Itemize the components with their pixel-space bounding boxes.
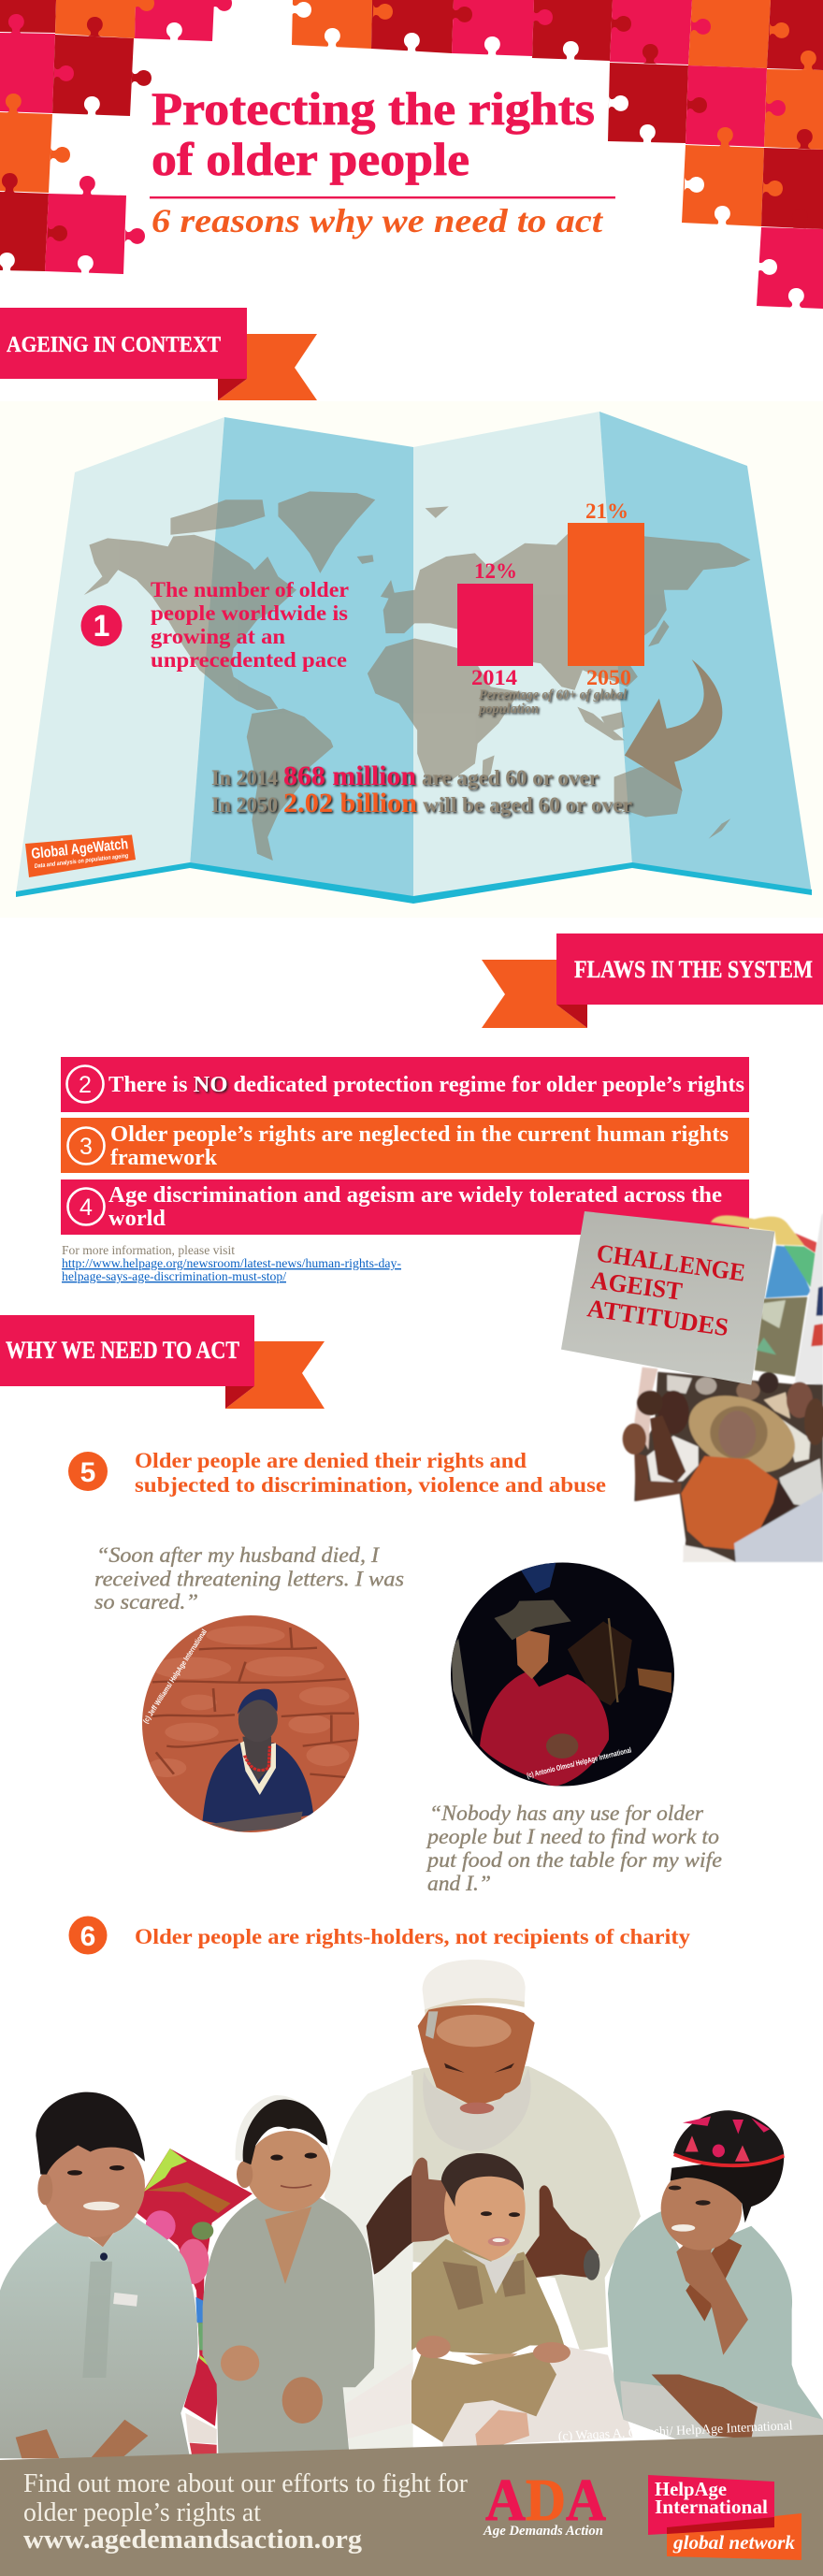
more information link: http://www.helpage.org/newsroom/latest-news/human-rights-day- (62, 1257, 401, 1271)
baby and elder hands (right half, front) (412, 2153, 599, 2446)
title (152, 82, 595, 185)
more information link: For more information, please visit (62, 1244, 235, 1258)
flaw 4 (61, 1179, 749, 1235)
boy with cap (608, 2110, 823, 2439)
quote 2: people but I need to find work to (426, 1825, 719, 1848)
boy in white cap (203, 2095, 375, 2453)
bar chart (457, 499, 644, 716)
statistic: 2050: will be aged 60 or over (423, 793, 632, 817)
logo: HelpAge International: International (655, 2496, 768, 2518)
decorative puzzle: top row (292, 0, 823, 70)
footer band (0, 2435, 823, 2576)
reason 6: 6 (80, 1921, 95, 1952)
statistic: 2050: In 2050 (211, 793, 278, 817)
photo credit: family: (c) Waqas A. Qureshi/ HelpAge International (557, 2419, 793, 2444)
logo: HelpAge International (648, 2475, 801, 2560)
bar chart: Percentage of 60+ of global (479, 687, 627, 702)
reason 5: 5 (80, 1457, 95, 1488)
photo: woman at brick wall (140, 1614, 365, 1838)
photo: protest crowd with placard: AGEIST (589, 1266, 684, 1306)
bar chart: population (477, 702, 539, 716)
quote 2: put food on the table for my wife (426, 1848, 722, 1872)
bar chart: 21% (585, 499, 628, 523)
text: older people growing (151, 578, 349, 672)
photo: protest crowd with placard: ATTITUDES (585, 1294, 730, 1341)
folded map panel (16, 412, 812, 904)
statistic: 2014: In 2014 (211, 766, 278, 789)
photo credit: man: (c) Antonio Olmos/ HelpAge International (526, 1745, 632, 1780)
arrow (625, 659, 722, 791)
photo: elder with children (0, 1960, 823, 2458)
flaw 2: There is NO dedicated protection regime for older people’s rights (108, 1073, 744, 1097)
text: older people growing: people worldwide is (151, 601, 348, 625)
statistic: 2014: are aged 60 or over (422, 766, 599, 789)
statistic: 2050: 2.02 billion (283, 788, 417, 818)
reason 5 (68, 1449, 606, 1497)
title: Protecting the rights (152, 82, 595, 135)
quote 2 (426, 1802, 722, 1895)
logo: Global AgeWatch: Global AgeWatch (31, 836, 129, 862)
world map (84, 491, 751, 861)
reason 6 (69, 1916, 691, 1955)
title: of older people (152, 133, 469, 185)
section banner: why we need to act (0, 1315, 325, 1409)
subtitle: 6 reasons why we need to act (152, 202, 603, 239)
bar chart: 2014 (471, 666, 518, 689)
section banner: ageing in context: AGEING IN CONTEXT (7, 333, 221, 357)
elder (right half, behind) (412, 1960, 641, 2447)
logo: ADA: ADA (485, 2467, 606, 2533)
flaw 3: 3 (79, 1134, 93, 1160)
flaw 4: 4 (79, 1194, 93, 1221)
footer call to action (23, 2469, 469, 2554)
flaw 3: framework (110, 1146, 218, 1170)
title rule (150, 196, 615, 198)
quote 2: “Nobody has any use for older (429, 1802, 704, 1825)
text: older people growing: unprecedented pace (151, 648, 347, 672)
flaw 3: Older people’s rights are neglected in the current human rights (110, 1122, 729, 1147)
photo: protest crowd with placard: CHALLENGE (595, 1238, 747, 1287)
logo: Global AgeWatch (25, 834, 136, 877)
logo: Global AgeWatch: Data and analysis on population ageing (34, 853, 129, 870)
quote 1: so scared.” (94, 1590, 198, 1614)
statistic: 2050 (211, 788, 632, 818)
bar chart: 12% (474, 559, 517, 583)
statistic: 2014 (211, 760, 599, 791)
flaw 2: 2 (79, 1072, 92, 1098)
reason 5: Older people are denied their rights and (135, 1449, 527, 1472)
statistic: 2014: 868 million (283, 760, 416, 791)
footer call to action: older people’s rights at (23, 2498, 261, 2527)
flaw 2 (61, 1057, 749, 1112)
logo: ADA: Age Demands Action (483, 2524, 603, 2539)
flaw 4: world (108, 1207, 166, 1231)
more information link: helpage-says-age-discrimination-must-stop/ (62, 1270, 286, 1284)
reason 6: Older people are rights-holders, not recipients of charity (135, 1925, 691, 1948)
footer call to action: www.agedemandsaction.org (23, 2525, 363, 2554)
number badge 1 (80, 605, 122, 646)
boy on left (0, 2092, 197, 2458)
photo: protest crowd with placard (561, 1211, 823, 1562)
quote 1: “Soon after my husband died, I (96, 1543, 380, 1567)
number badge 1: 1 (94, 609, 109, 643)
section banner: ageing in context (0, 308, 317, 400)
bar chart: 2050 (586, 666, 631, 689)
quote 1 (94, 1543, 404, 1614)
pillow and left clothes (137, 2075, 413, 2454)
logo: HelpAge International: global network (672, 2531, 795, 2554)
logo: HelpAge International: HelpAge (655, 2478, 727, 2500)
quote 1: received threatening letters. I was (94, 1568, 404, 1590)
section banner: flaws in the system (482, 933, 823, 1028)
reason 5: subjected to discrimination, violence and abuse (135, 1473, 606, 1497)
quote 2: and I.” (427, 1872, 491, 1895)
text: older people growing: growing at an (151, 625, 285, 648)
flaw 3 (61, 1118, 749, 1173)
photo: man in red sweater (449, 1559, 678, 1789)
text: older people growing: The number of older (151, 578, 349, 601)
flaw 4: Age discrimination and ageism are widely tolerated across the (108, 1183, 722, 1208)
section banner: why we need to act: WHY WE NEED TO ACT (6, 1337, 239, 1364)
photo credit: woman: (c) Jeff Williams/ HelpAge International (141, 1628, 209, 1725)
footer call to action: Find out more about our efforts to fight for (23, 2469, 469, 2498)
more information link (62, 1244, 401, 1284)
decorative puzzle: top left (0, 0, 232, 275)
decorative puzzle: right side (608, 63, 823, 309)
cream section background (0, 401, 823, 918)
